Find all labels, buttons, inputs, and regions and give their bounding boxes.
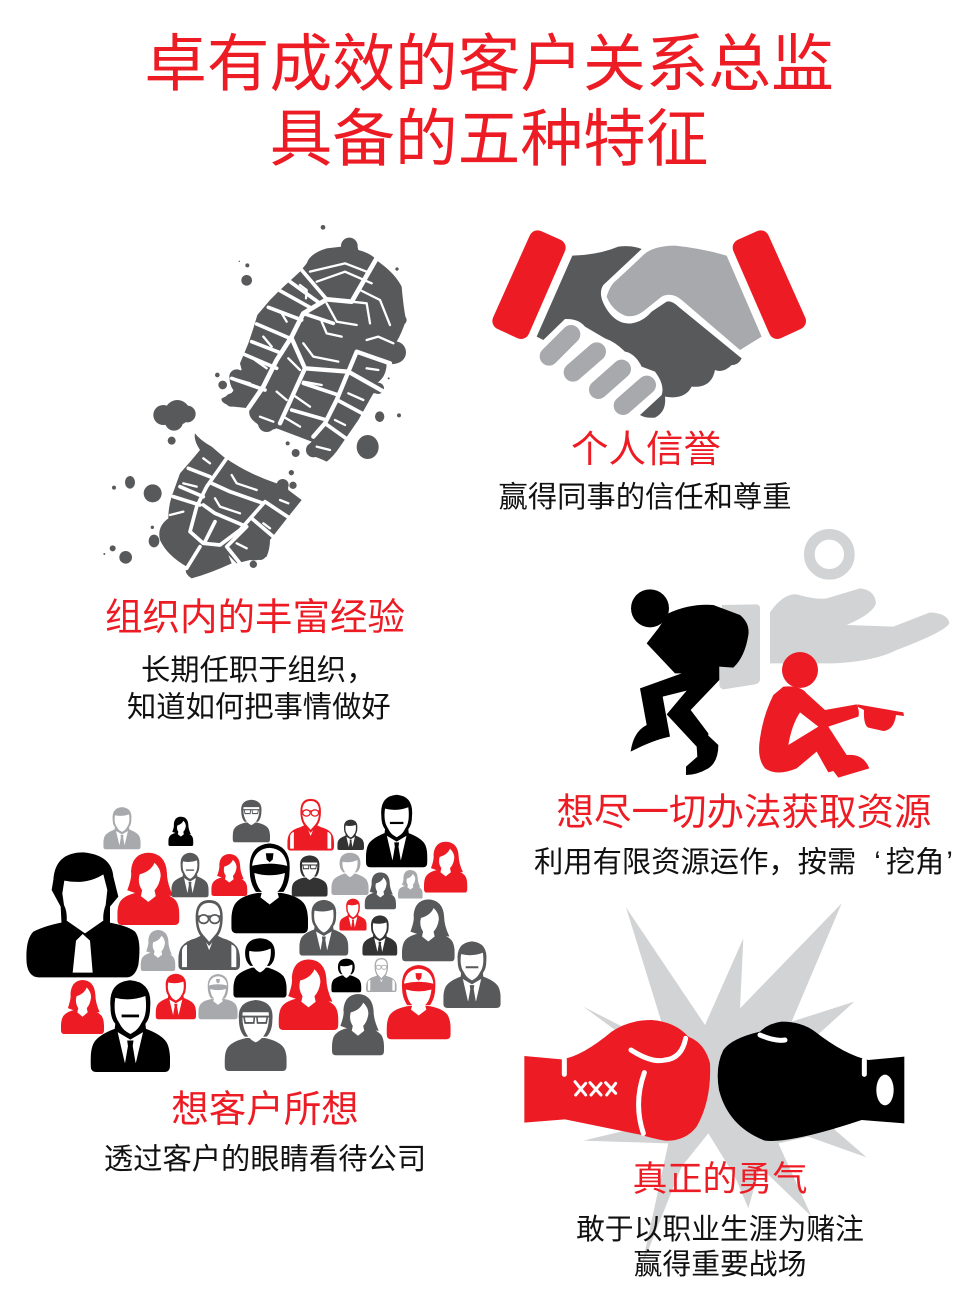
text: resourcefulness description: 利用有限资源运作，按需 ‘挖角’ <box>534 846 953 879</box>
heading: customer thinking: 想客户所想 <box>171 1088 359 1130</box>
text: courage description: 敢于以职业生涯为赌注 <box>576 1214 864 1246</box>
heading: experience: 组织内的丰富经验 <box>105 596 405 638</box>
icon: boxing gloves with burst <box>524 903 904 1267</box>
text: courage description: 赢得重要战场 <box>634 1249 806 1281</box>
text: experience description <box>127 654 391 724</box>
icon: handshake <box>501 239 797 418</box>
text: experience description: 知道如何把事情做好 <box>127 691 391 724</box>
title: 具备的五种特征 <box>270 104 708 174</box>
text: customer thinking description: 透过客户的眼睛看待公司 <box>104 1143 426 1176</box>
icon: crowd of people <box>26 795 501 1072</box>
heading: courage: 真正的勇气 <box>632 1160 808 1199</box>
title: 卓有成效的客户关系总监 <box>144 30 834 100</box>
text: reputation description: 赢得同事的信任和尊重 <box>499 481 791 514</box>
heading: resourcefulness: 想尽一切办法获取资源 <box>556 791 932 833</box>
heading: reputation: 个人信誉 <box>571 428 721 470</box>
icon: muddy boot print <box>103 225 407 578</box>
title <box>144 30 834 174</box>
icon: thief and beggar over a giving hand <box>631 534 949 778</box>
text: experience description: 长期任职于组织， <box>141 654 375 687</box>
large man with white tie <box>26 852 139 977</box>
text: courage description <box>576 1214 864 1281</box>
